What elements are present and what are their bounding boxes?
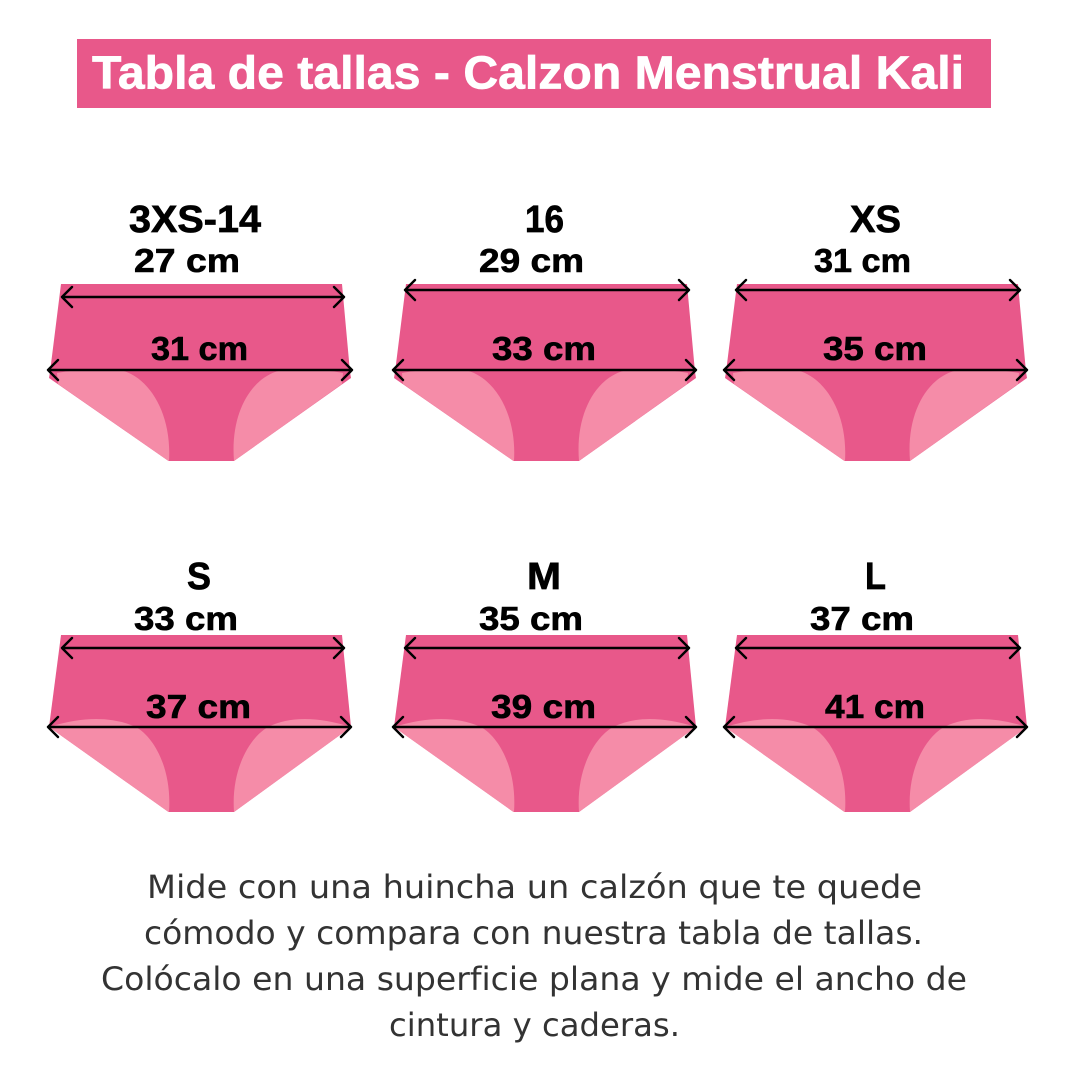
panel: size L: 41 cm bbox=[825, 688, 925, 725]
instructions text block: cómodo y compara con nuestra tabla de tallas. bbox=[144, 914, 923, 952]
panel: size XS: 35 cm bbox=[823, 330, 927, 367]
instructions text block bbox=[101, 868, 967, 1044]
panel: size S: 37 cm bbox=[146, 688, 251, 725]
panel: size M: 35 cm bbox=[479, 600, 583, 637]
panel: size 16: 33 cm bbox=[492, 330, 596, 367]
panel: size L bbox=[724, 556, 1027, 812]
panel: size 3XS-14 bbox=[48, 199, 352, 461]
panel: size XS: XS bbox=[850, 199, 901, 241]
panel: size 3XS-14: 27 cm bbox=[134, 242, 240, 279]
panel: size S: 33 cm bbox=[134, 600, 238, 637]
title banner bbox=[77, 39, 991, 108]
panel: size M: M bbox=[527, 556, 561, 598]
instructions text block: cintura y caderas. bbox=[389, 1006, 680, 1044]
panel: size M: 39 cm bbox=[491, 688, 596, 725]
panel: size 3XS-14: 3XS-14 bbox=[129, 199, 261, 241]
instructions text block: Colócalo en una superficie plana y mide el ancho de bbox=[101, 960, 967, 998]
panel: size 3XS-14: 31 cm bbox=[151, 330, 248, 367]
panel: size XS bbox=[724, 199, 1027, 461]
panel: size 16: 29 cm bbox=[479, 242, 584, 279]
instructions text block: Mide con una huincha un calzón que te quede bbox=[147, 868, 922, 906]
panel: size L: L bbox=[865, 556, 886, 598]
panel: size S bbox=[48, 556, 351, 812]
panel: size S: S bbox=[187, 556, 211, 598]
panel: size L: 37 cm bbox=[810, 600, 914, 637]
panel: size 16: 16 bbox=[525, 199, 564, 241]
panel: size M bbox=[393, 556, 696, 812]
panel: size XS: 31 cm bbox=[814, 242, 911, 279]
title text: Tabla de tallas - Calzon Menstrual Kali bbox=[92, 46, 964, 98]
panel: size 16 bbox=[393, 199, 696, 461]
